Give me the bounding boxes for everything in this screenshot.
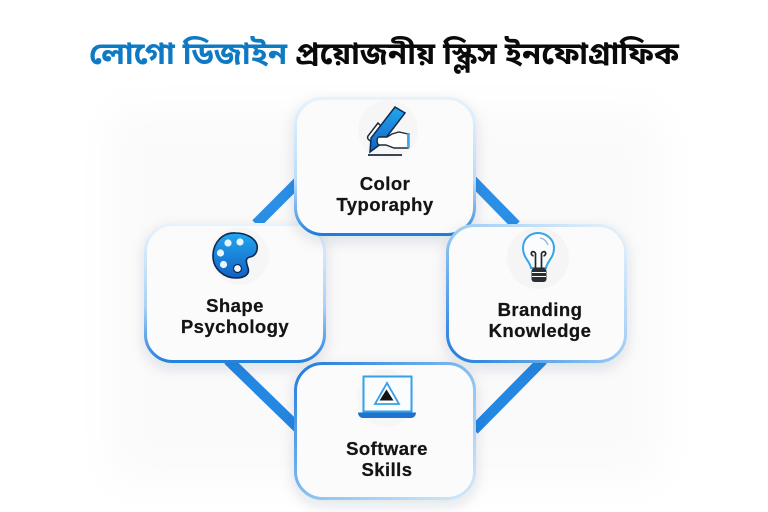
connectors (228, 180, 543, 430)
panel: Shape Psychology (146, 224, 324, 362)
panel: Color Typography (296, 98, 474, 234)
label: Skills (361, 459, 413, 480)
background haze (110, 110, 660, 480)
label: Software (346, 438, 428, 459)
label: Shape (206, 295, 264, 316)
icon: light bulb (507, 227, 569, 289)
label: Color (360, 173, 410, 194)
label: Psychology (181, 316, 289, 337)
icon: laptop (357, 369, 416, 427)
panel: Software Skills (296, 364, 474, 498)
label: Branding (498, 299, 582, 320)
label: Typoraphy (336, 194, 434, 215)
title: লোগো ডিজাইন প্রয়োজনীয় স্কিলস ইনফোগ্রাফিক (89, 35, 680, 77)
label: Knowledge (489, 320, 591, 341)
icon: pen and hand (358, 100, 418, 160)
icon: palette (211, 227, 269, 285)
panel: Branding Knowledge (448, 226, 626, 362)
